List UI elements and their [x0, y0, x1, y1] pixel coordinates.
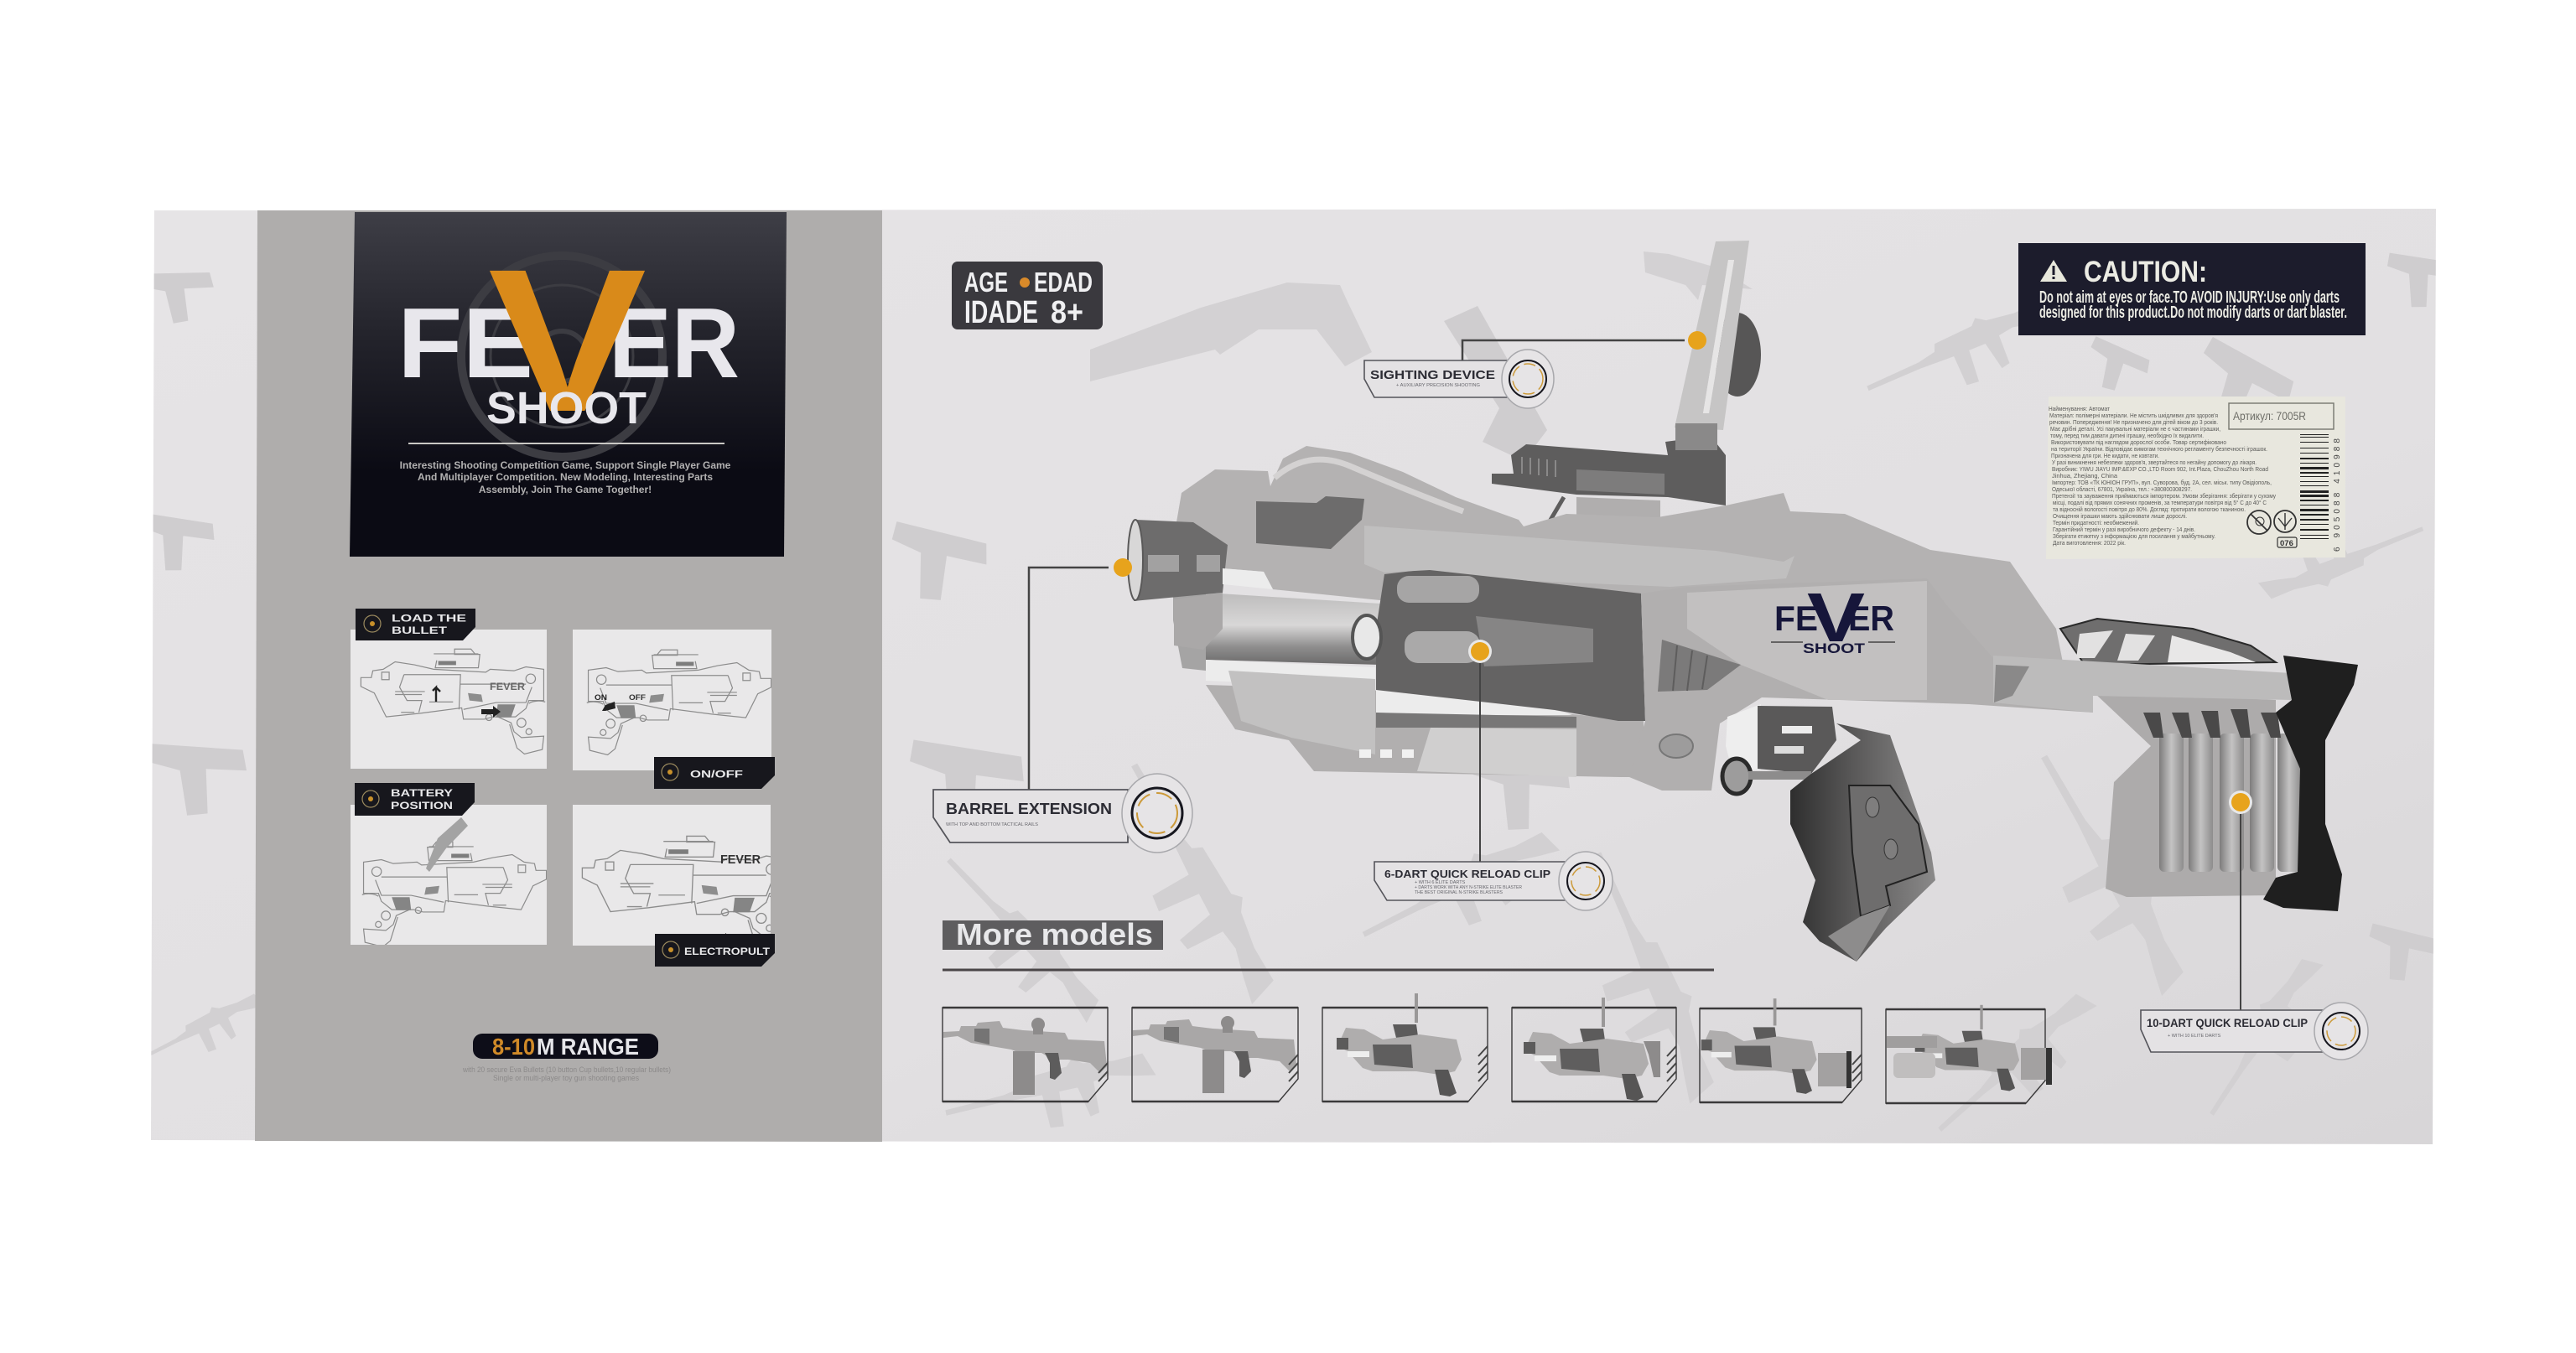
icon: trigger arrow: [481, 706, 501, 718]
callout: six dart clip: THE BEST ORIGINAL N-STRIKE BLASTERS: [1415, 890, 1503, 895]
callout: sighting device: SIGHTING DEVICE: [1370, 368, 1495, 382]
sticker legal text: Очищення іграшки мають здійснювати лише дорослі.: [2053, 512, 2187, 520]
label: load the bullet: BULLET: [392, 625, 448, 636]
icon: not for under 3: [2247, 511, 2271, 534]
upper shell: [1176, 446, 2063, 662]
tagline: Assembly, Join The Game Together!: [479, 484, 652, 495]
label: electropult: ELECTROPULT: [684, 946, 771, 957]
label: load the bullet: [356, 609, 475, 640]
article number box: Артикул: 7005R: [2233, 409, 2306, 422]
sight disc: [1714, 313, 1761, 397]
pistol grip: [1790, 723, 1935, 962]
model 1: [943, 1008, 1108, 1102]
logo word FEVER: FE: [397, 288, 533, 399]
range description: Single or multi-player toy gun shooting games: [493, 1074, 639, 1083]
muzzle: [1128, 520, 1228, 650]
sticker legal text: Зберігати етикетку з інформацією для посилання у майбутньому.: [2053, 532, 2215, 540]
callout: ten dart clip: [2141, 791, 2368, 1060]
icon: screwdriver: [426, 817, 468, 872]
sticker legal text: Призначена для гри. Не кидати, не ковтати.: [2051, 452, 2159, 459]
clip holder: [2093, 692, 2276, 897]
sticker legal text: У разі виникнення небезпеки здоров'я, звертайтеся по негайну допомогу до лікаря.: [2052, 459, 2257, 466]
shadow behind barrel: [1173, 587, 1206, 671]
callout ring: [2314, 1003, 2368, 1060]
article number box: [2229, 403, 2334, 429]
label: battery position: [355, 783, 475, 816]
callout ring: [1502, 350, 1554, 408]
callout: six dart clip: + DARTS WORK WITH ANY N-STRIKE ELITE BLASTER: [1415, 885, 1522, 890]
package box background: [151, 209, 2436, 1144]
callout label box: [1374, 862, 1566, 900]
tagline: Interesting Shooting Competition Game, Support Single Player Game: [400, 459, 731, 471]
upper side panel: [1364, 526, 1794, 587]
main toy blaster illustration: [1128, 241, 2358, 962]
callout label box: [933, 790, 1128, 842]
icon: conformity mark: 076: [2280, 539, 2293, 548]
callout: sighting device: [1364, 331, 1706, 408]
callout: barrel extension: [933, 558, 1192, 853]
sticker legal text: тому, перед тим давати дитині іграшку, необхідно їх видалити.: [2050, 432, 2204, 439]
receiver with logo panel: [1629, 578, 2093, 791]
label: on off: [654, 757, 775, 789]
label: battery position: BATTERY: [391, 787, 453, 799]
label: load the bullet: LOAD THE: [392, 612, 466, 624]
panel: on off: OFF: [629, 693, 647, 702]
range description: with 20 secure Eva Bullets (10 button Cup bullets,10 regular bullets): [462, 1065, 671, 1075]
trigger guard opening: [1726, 704, 1761, 771]
caution box: Do not aim at eyes or face.TO AVOID INJURY:Use only darts: [2039, 288, 2340, 307]
icon: switch arrow: [602, 702, 615, 711]
range badge: [473, 1034, 658, 1060]
sticker legal text: Претензії та зауваження приймаються імпортером. Умови зберігання: зберігати у сухому: [2052, 492, 2276, 500]
more models heading: More models: [956, 917, 1153, 951]
target rings decoration: [461, 256, 662, 457]
vent grille: [1658, 640, 1741, 692]
range description: [462, 1065, 671, 1083]
panel: battery position: [351, 783, 547, 946]
callout: sighting device: + AUXILIARY PRECISION SHOOTING: [1396, 383, 1480, 388]
age badge: 8+: [1051, 295, 1083, 330]
stock butt: [2263, 656, 2358, 911]
label: electropult: [655, 934, 775, 967]
label: battery position: POSITION: [391, 800, 453, 811]
sticker legal text: місці, подалі від прямих сонячних променів, за температури повітря від 5° С до 40° С: [2053, 499, 2267, 506]
caution box: designed for this product.Do not modify darts or dart blaster.: [2039, 303, 2347, 322]
callout: six dart clip: + WITH 6 ELITE DARTS: [1415, 880, 1466, 885]
tagline: And Multiplayer Competition. New Modeling, Interesting Parts: [418, 471, 713, 483]
age badge: EDAD: [1034, 267, 1093, 298]
callout ring: [1122, 774, 1192, 853]
silver barrel: [1206, 593, 1380, 665]
icon: trigger arrow: [714, 933, 733, 945]
panel: brand logo: [350, 212, 787, 557]
background ghost gun pattern: [133, 251, 2460, 1157]
logo on blaster: ER: [1848, 599, 1894, 638]
sticker legal text: Одеської області, 67801, Україна, тел.: +380800308297.: [2052, 485, 2192, 493]
sight base: [1492, 436, 1726, 505]
logo word FEVER: ER: [609, 288, 740, 399]
barcode: 6 905088 410988: [2333, 438, 2342, 552]
tagline: [400, 459, 731, 495]
callout label box: [1364, 360, 1509, 397]
revolving drum: [1353, 568, 1645, 721]
sticker legal text: Використовувати під наглядом дорослої особи. Товар сертифіковано: [2051, 438, 2226, 446]
logo orange V: V: [488, 227, 647, 454]
stock upper frame: [2060, 619, 2276, 665]
rail mount: [1576, 497, 1660, 521]
model 4: [1512, 998, 1676, 1102]
callout: six dart clip: [1374, 640, 1613, 910]
age badge: AGE: [964, 267, 1008, 298]
dark shell block: [1256, 496, 1364, 549]
callout: ten dart clip: + WITH 10 ELITE DARTS: [2168, 1034, 2221, 1039]
logo on blaster: V: [1807, 578, 1865, 656]
logo on blaster: SHOOT: [1803, 640, 1866, 656]
model 2: [1132, 1008, 1298, 1102]
caution box: CAUTION:: [2084, 256, 2207, 288]
white gap beneath barrel: [1206, 660, 1375, 687]
trigger: [1722, 706, 1836, 794]
grey left band: [255, 210, 882, 1142]
sticker legal text: Jinhua, Zhejiang, China: [2052, 472, 2118, 480]
age badge: [952, 262, 1103, 330]
icon: warning triangle: [2040, 260, 2067, 282]
screw: [1659, 734, 1693, 758]
lower fore section: [1206, 685, 1644, 777]
stored darts: [2143, 709, 2301, 872]
model 5: [1700, 998, 1862, 1102]
sticker legal text: та відносній вологості повітря до 80%. Догляд: протирати вологою тканиною.: [2053, 505, 2246, 513]
sticker legal text: Виробник: YIWU JIAYU IMP.&EXP CO.,LTD Room 902, Int.Plaza, ChouZhou North Road: [2052, 465, 2268, 473]
white gap and rail: [1376, 690, 1572, 715]
callout ring: [1559, 852, 1613, 910]
small logo: FEVER: [490, 681, 525, 692]
callout: barrel extension: BARREL EXTENSION: [946, 801, 1112, 817]
label: on off: ON/OFF: [690, 768, 743, 780]
sticker legal text: на території України. Відповідає вимогам технічного регламенту безпечності іграшок.: [2051, 445, 2267, 453]
callout: barrel extension: WITH TOP AND BOTTOM TACTICAL RAILS: [946, 822, 1038, 827]
panel: electropult: [573, 805, 787, 967]
age badge: IDADE: [964, 295, 1038, 330]
hump ridge: [1275, 459, 1463, 511]
callout: six dart clip: 6-DART QUICK RELOAD CLIP: [1384, 868, 1550, 880]
stock tube: [1993, 656, 2292, 713]
panel: load the bullet: [351, 609, 547, 769]
caution box: [2018, 243, 2366, 335]
sticker legal text: речовин. Попередження! Не призначено для дітей віком до 3 років.: [2049, 418, 2218, 426]
range badge: 8-10: [492, 1034, 535, 1060]
logo on blaster: [1771, 578, 1895, 656]
sticker legal text: Матеріал: полімерні матеріали. Не містить шкідливих для здоров'я: [2049, 412, 2218, 419]
sticker legal text: Найменування: Автомат: [2049, 405, 2111, 412]
panel: on off: [573, 630, 775, 789]
logo on blaster: FE: [1774, 599, 1818, 638]
small logo: FEVER: [720, 853, 761, 867]
sticker legal text: Гарантійний термін у разі виробничого дефекту - 14 днів.: [2053, 526, 2195, 533]
sticker legal text: [2049, 405, 2276, 547]
icon: up arrow: [433, 687, 440, 702]
range badge: M RANGE: [537, 1034, 639, 1060]
product sticker: [2046, 397, 2345, 559]
callout label box: [2141, 1010, 2333, 1052]
icon: conformity mark: [2274, 511, 2297, 548]
rail dots: [1359, 749, 1414, 758]
logo word FEVER: [397, 288, 740, 399]
logo word SHOOT: SHOOT: [486, 383, 647, 433]
white gap under muzzle: [1223, 568, 1273, 589]
model 3: [1322, 993, 1488, 1102]
callout: ten dart clip: 10-DART QUICK RELOAD CLIP: [2147, 1016, 2308, 1029]
model 6: [1886, 1005, 2052, 1103]
sticker legal text: Термін придатності: необмежений.: [2053, 519, 2139, 526]
sticker legal text: Має дрібні деталі. Усі пакувальні матеріали не є частинами іграшки,: [2050, 425, 2220, 433]
barcode: [2300, 434, 2342, 552]
switch labels: ON: [595, 693, 607, 702]
sticker legal text: Дата виготовлення: 2022 рік.: [2053, 539, 2126, 547]
sight blade: [1675, 241, 1749, 430]
sticker legal text: Імпортер: ТОВ «ТК ЮНІОН ГРУП», вул. Суворова, буд. 2А, сел. міськ. типу Овідіополь,: [2052, 479, 2272, 486]
